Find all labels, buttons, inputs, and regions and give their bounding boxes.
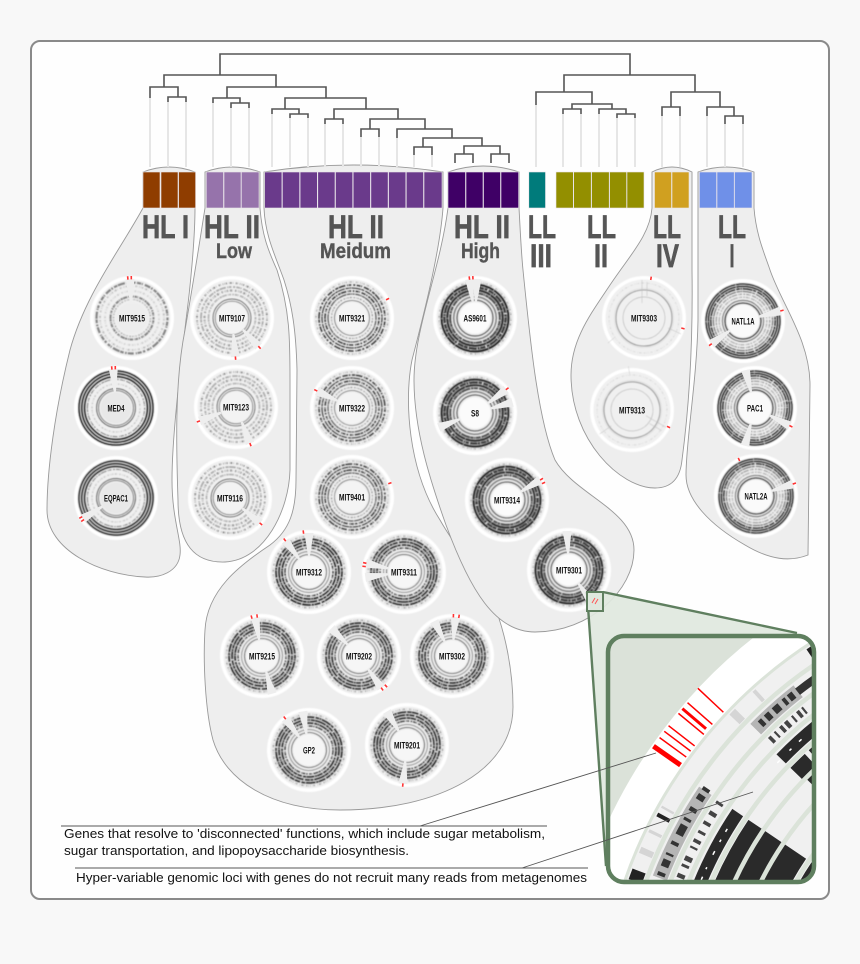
genome ring: MIT9321 bbox=[310, 276, 394, 360]
heading: HL II Low: HL II bbox=[204, 209, 260, 245]
genome ring: MIT9107: MIT9107 bbox=[219, 313, 245, 324]
heading: LL III: III bbox=[530, 238, 552, 274]
annotation: disconnected functions: Genes that resolve to 'disconnected' functions, which include sugar metabolism, bbox=[64, 826, 545, 841]
heading: HL II Meidum bbox=[320, 209, 391, 263]
genome ring: MIT9301 bbox=[512, 513, 626, 627]
genome ring: MIT9201 bbox=[350, 688, 464, 802]
genome ring: MIT9302 bbox=[398, 602, 506, 710]
genome ring: MIT9314 bbox=[448, 441, 566, 559]
heading: LL IV bbox=[653, 209, 681, 274]
heading: LL II: LL bbox=[587, 209, 616, 245]
genome ring: MIT9202: MIT9202 bbox=[346, 651, 372, 662]
track 7 dark blocks bbox=[764, 844, 806, 880]
track 3 specks bbox=[676, 706, 808, 880]
genome ring: MIT9116 bbox=[188, 456, 272, 540]
heading: HL II High: HL II bbox=[454, 209, 510, 245]
genome ring: NATL1A: NATL1A bbox=[732, 316, 755, 327]
genome ring: MIT9515: MIT9515 bbox=[119, 313, 145, 324]
genome ring: MIT9301: MIT9301 bbox=[556, 565, 582, 576]
genome ring: MIT9322: MIT9322 bbox=[339, 403, 365, 414]
genome ring: S8 bbox=[421, 359, 529, 467]
heading: LL IV: IV bbox=[656, 238, 679, 274]
track 5 dark blocks bbox=[715, 747, 812, 880]
zoom callout wedge bbox=[587, 592, 808, 880]
genome ring: GP2: GP2 bbox=[303, 745, 315, 756]
heading: HL II Low: Low bbox=[216, 240, 253, 263]
panel: HL II High hull bbox=[414, 166, 634, 632]
genome ring: MIT9313 bbox=[575, 353, 689, 467]
heading: LL III: LL bbox=[528, 209, 556, 245]
red gene ticks bbox=[653, 688, 723, 765]
heading: LL II: II bbox=[594, 238, 608, 274]
zoom source square bbox=[587, 592, 603, 611]
genome ring: MIT9123 bbox=[177, 348, 295, 466]
genome ring: AS9601 bbox=[433, 276, 517, 360]
genome ring: NATL2A: NATL2A bbox=[744, 491, 768, 502]
genome ring: MIT9314: MIT9314 bbox=[494, 495, 520, 506]
genome ring: MIT9401: MIT9401 bbox=[339, 492, 365, 503]
genome ring: MED4: MED4 bbox=[108, 403, 125, 414]
genome ring: MIT9401 bbox=[303, 448, 401, 546]
genome ring: PAC1 bbox=[713, 366, 797, 450]
genome ring: GP2 bbox=[255, 696, 363, 804]
heading: LL III bbox=[528, 209, 556, 274]
heading: LL I: LL bbox=[718, 209, 746, 245]
genome ring: MIT9302: MIT9302 bbox=[439, 651, 465, 662]
annotation: hyper-variable loci: Hyper-variable genomic loci with genes do not recruit many reads from metagenomes bbox=[76, 870, 588, 885]
genome ring: MIT9313: MIT9313 bbox=[619, 405, 645, 416]
heading: HL II High: High bbox=[461, 240, 500, 263]
heading: HL II Low bbox=[204, 209, 260, 263]
genome ring: MIT9311: MIT9311 bbox=[391, 567, 418, 578]
genome ring: MIT9515 bbox=[90, 276, 174, 360]
panel: HL II Low hull bbox=[177, 167, 290, 562]
genome ring: MIT9303 bbox=[602, 276, 686, 360]
panel: HL II Medium hull bbox=[204, 165, 513, 810]
heading: LL II bbox=[587, 209, 616, 274]
genome ring: MIT9116: MIT9116 bbox=[217, 493, 243, 504]
panel: LL I hull bbox=[686, 167, 810, 559]
genome ring: S8: S8 bbox=[471, 408, 479, 419]
panel: LL IV hull bbox=[571, 167, 692, 488]
track 6 dark blocks bbox=[738, 775, 812, 880]
genome ring: MED4 bbox=[74, 366, 158, 450]
genome ring: NATL2A bbox=[702, 442, 810, 550]
genome ring: PAC1: PAC1 bbox=[747, 403, 763, 414]
track 8 dark blocks bbox=[800, 862, 812, 880]
track 4 dark blocks bbox=[694, 722, 812, 880]
genome ring: MIT9123: MIT9123 bbox=[223, 402, 249, 413]
annotation: disconnected functions bbox=[61, 753, 656, 858]
genome ring: EQPAC1: EQPAC1 bbox=[104, 493, 128, 504]
track 2 streaks bbox=[653, 686, 803, 880]
genome ring: MIT9311 bbox=[345, 513, 463, 631]
genome ring: NATL1A bbox=[701, 279, 785, 363]
ring separators bbox=[624, 643, 812, 880]
genome ring: MIT9215: MIT9215 bbox=[249, 651, 275, 662]
inset border bbox=[608, 636, 814, 882]
genome ring: MIT9322 bbox=[295, 351, 409, 465]
annotation: hyper-variable loci bbox=[75, 792, 753, 885]
zoom callout outline lines bbox=[587, 592, 797, 866]
genome ring: AS9601: AS9601 bbox=[464, 313, 487, 324]
genome ring: MIT9303: MIT9303 bbox=[631, 313, 657, 324]
heading: HL I: HL I bbox=[142, 209, 189, 245]
genome ring: MIT9312: MIT9312 bbox=[296, 567, 322, 578]
genome ring: EQPAC1 bbox=[59, 441, 173, 555]
panel: HL I hull bbox=[47, 167, 195, 577]
white specks in dark blocks bbox=[700, 738, 802, 880]
genome ring: MIT9202 bbox=[302, 599, 416, 713]
heading: HL II High bbox=[454, 209, 510, 263]
genome ring: MIT9215 bbox=[213, 607, 311, 705]
dendrogram bbox=[150, 54, 743, 167]
heading: LL I: I bbox=[730, 238, 734, 274]
heading: HL II Meidum: Meidum bbox=[320, 240, 391, 263]
track 1 marks bbox=[628, 646, 812, 880]
heading: LL IV: LL bbox=[653, 209, 681, 245]
genome ring: MIT9201: MIT9201 bbox=[394, 740, 420, 751]
genome ring: MIT9312 bbox=[267, 530, 351, 614]
genome ring: MIT9321: MIT9321 bbox=[339, 313, 365, 324]
genome ring: MIT9107 bbox=[190, 276, 274, 360]
heading: HL II Meidum: HL II bbox=[328, 209, 384, 245]
annotation: disconnected functions: sugar transportation, and lipopoysaccharide biosynthesis. bbox=[64, 843, 409, 858]
inset: zoomed genome detail bbox=[606, 634, 816, 884]
heading: LL I bbox=[718, 209, 746, 274]
clade colour bars bbox=[143, 172, 752, 208]
